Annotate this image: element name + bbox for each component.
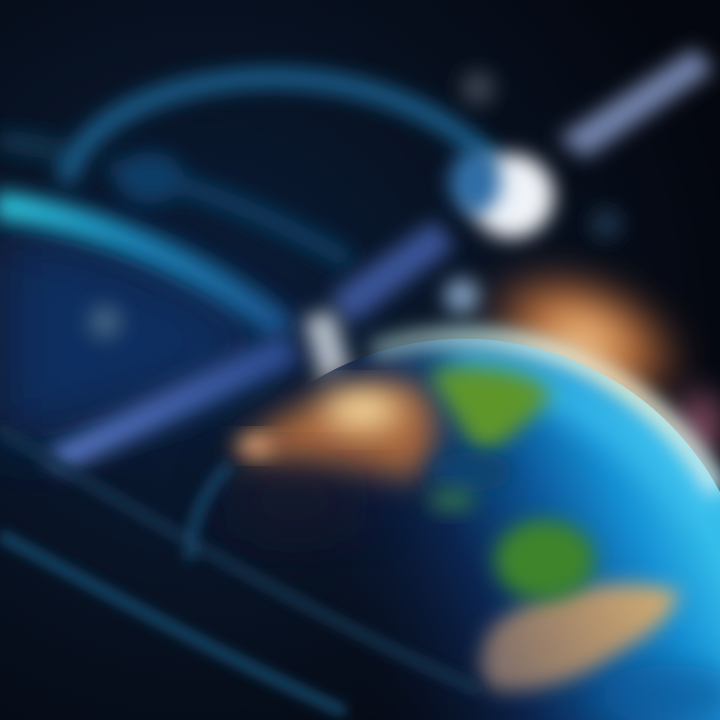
continent: south green (495, 520, 595, 600)
solar panel: upper middle (330, 220, 455, 325)
orbit ring: top (0, 78, 495, 262)
small nodes (88, 71, 622, 339)
orbit arc: bright cyan (0, 205, 285, 330)
earth rim highlight (372, 337, 718, 492)
continent: dim green patch (428, 488, 476, 512)
solar panel: lower left (45, 332, 300, 472)
earth inner atmosphere (450, 365, 712, 515)
lower right shade (600, 665, 720, 720)
ocean patch (432, 452, 512, 492)
earth (174, 337, 720, 720)
continent: north green (430, 367, 552, 452)
orbit lines: lower left (0, 430, 480, 712)
continent: tan south (481, 584, 680, 691)
satellite body: center joint (303, 310, 350, 384)
satellite: upper right with panel (449, 48, 714, 238)
continent: orange land glow (240, 382, 436, 480)
sun glow (457, 217, 720, 459)
nebula: left blue region (0, 230, 280, 450)
